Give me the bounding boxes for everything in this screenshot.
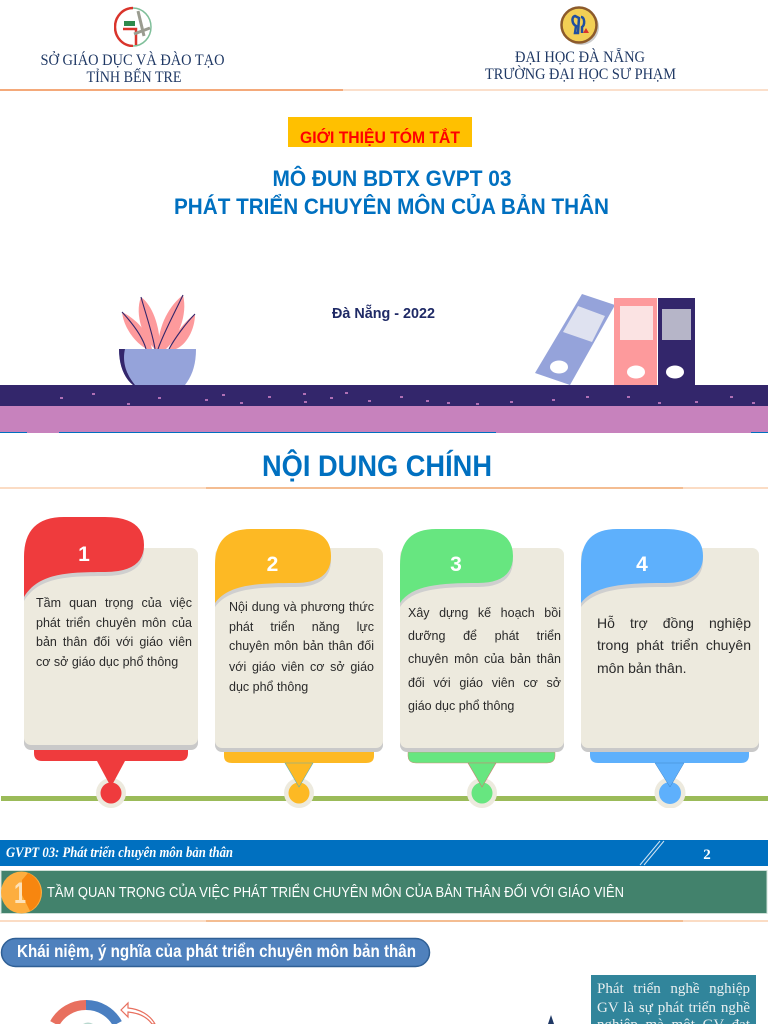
icon: department logo (114, 6, 152, 47)
section banner (0, 870, 768, 914)
card 3: giáo dục phổ thông (408, 699, 514, 713)
text: department name: TỈNH BẾN TRE (86, 69, 182, 86)
card 4: 4 (636, 553, 648, 576)
card 1 (24, 517, 198, 808)
card 1: phát triển chuyên môn của (36, 616, 192, 630)
card 4: trong phát triển chuyên (597, 637, 751, 653)
card 3: đối với giáo viên cơ sở (408, 676, 561, 690)
header: education department (40, 6, 224, 86)
icon: small figure (548, 1015, 554, 1024)
callout: definition: Phát triển nghề nghiệp (597, 981, 750, 997)
card 4 (581, 529, 759, 808)
card 2: phát triển năng lực (229, 620, 374, 634)
callout: definition: GV là sự phát triển nghề (597, 1000, 750, 1016)
card 3: chuyên môn của bản thân (408, 652, 561, 666)
card 3: Xây dựng kế hoạch bồi (408, 606, 561, 620)
card 3: dưỡng để phát triển (408, 629, 561, 643)
card 2: với giáo viên cơ sở giáo (229, 660, 374, 674)
section banner: TẦM QUAN TRỌNG CỦA VIỆC PHÁT TRIỂN CHUYÊN MÔN CỦA BẢN THÂN ĐỐI VỚI GIÁO VIÊN (47, 883, 624, 901)
card 4: môn bản thân. (597, 660, 687, 676)
card 1: 1 (78, 543, 90, 566)
section banner: 1 (14, 877, 26, 910)
text: university name: ĐẠI HỌC ĐÀ NẴNG (515, 48, 645, 66)
card 3 (400, 529, 564, 808)
text: department name: SỞ GIÁO DỤC VÀ ĐÀO TẠO (40, 52, 224, 69)
card 1: Tầm quan trọng của việc (36, 596, 192, 610)
card 4: Hỗ trợ đồng nghiệp (597, 615, 751, 631)
shelf (0, 385, 768, 433)
card 2: Nội dung và phương thức (229, 600, 374, 614)
text: department name (40, 51, 224, 86)
label: summary badge: GIỚI THIỆU TÓM TẮT (300, 128, 461, 147)
icon: binders (535, 294, 695, 385)
card 2: 2 (267, 553, 278, 576)
card 1: cơ sở giáo dục phổ thông (36, 655, 178, 669)
icon: potted plant (119, 294, 196, 385)
icon: university logo (560, 6, 599, 45)
pill heading (0, 938, 430, 968)
header: university (485, 6, 676, 83)
footer bar: module name and page number: GVPT 03: Phát triển chuyên môn bản thân (6, 845, 233, 861)
card 2: chuyên môn bản thân đối (229, 639, 374, 653)
chart: cycle diagram (50, 1000, 156, 1024)
label: summary badge (288, 117, 472, 147)
card 2 (215, 529, 383, 808)
title (174, 166, 609, 219)
title: MÔ ĐUN BDTX GVPT 03 (272, 166, 512, 191)
footer bar: module name and page number: 2 (703, 847, 711, 863)
callout: definition (591, 975, 756, 1024)
card 3: 3 (450, 553, 462, 576)
card 2: dục phổ thông (229, 680, 308, 694)
text: university name (485, 48, 676, 83)
card 1: bản thân đối với giáo viên (36, 635, 192, 649)
footer bar: module name and page number (0, 840, 768, 866)
text: place and year: Đà Nẵng - 2022 (332, 305, 435, 322)
